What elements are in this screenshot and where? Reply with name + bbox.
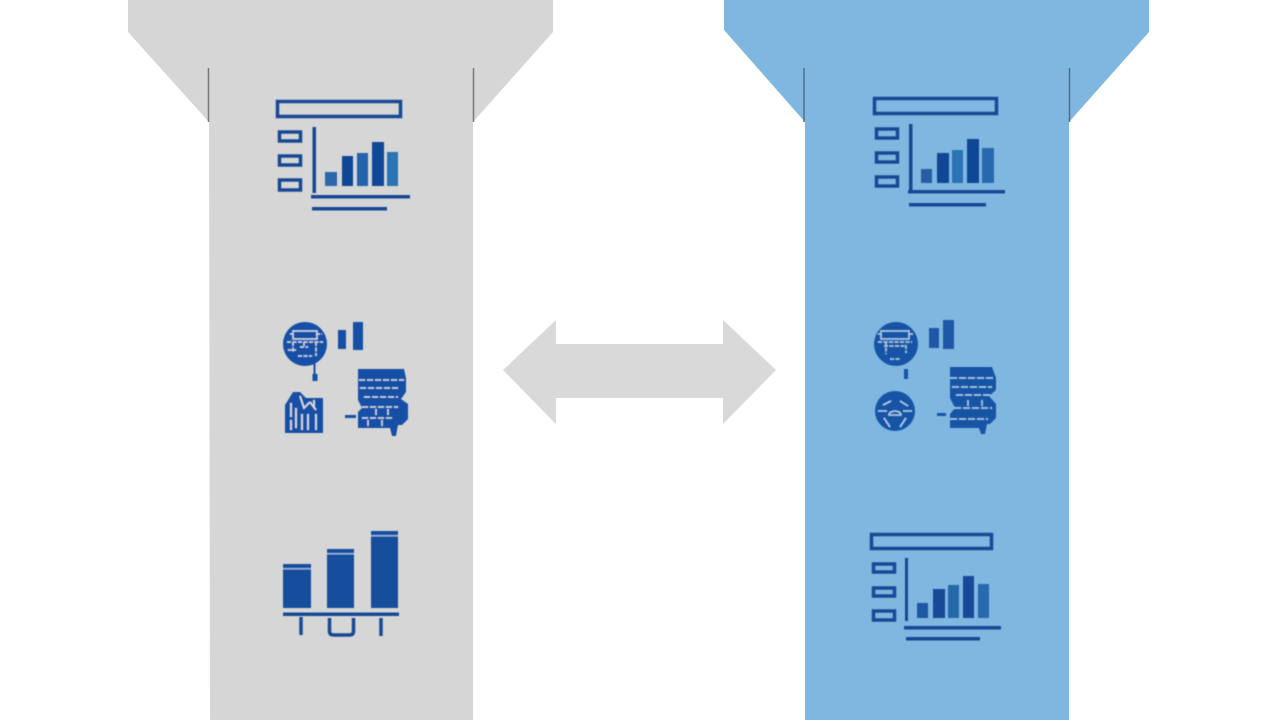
panel: left grey column [128, 0, 553, 720]
connector stem [904, 369, 908, 379]
building block [285, 392, 323, 433]
icon: right top dashboard chart [874, 98, 1005, 206]
mini bars [929, 320, 954, 349]
icon: left bar chart on baseline [283, 531, 399, 636]
globe node [283, 322, 327, 366]
short connector [937, 413, 946, 416]
server stack [950, 367, 996, 434]
connector stem [312, 362, 318, 381]
icon: left data network [283, 322, 408, 436]
right column funnel shape [724, 0, 1149, 720]
globe node [874, 322, 918, 366]
arrow: double-headed comparison arrow [503, 320, 776, 424]
icon: right data network [874, 320, 996, 434]
right column edge marks [804, 68, 1070, 122]
mini bars [338, 322, 363, 350]
icon: left dashboard chart [278, 102, 410, 210]
server stack [358, 369, 408, 436]
left column funnel shape [128, 0, 553, 720]
panel: right blue column [724, 0, 1149, 720]
short connector [345, 415, 356, 418]
wheel node [875, 391, 915, 431]
left column edge marks [208, 68, 474, 122]
icon: right bottom dashboard chart [872, 534, 1001, 640]
